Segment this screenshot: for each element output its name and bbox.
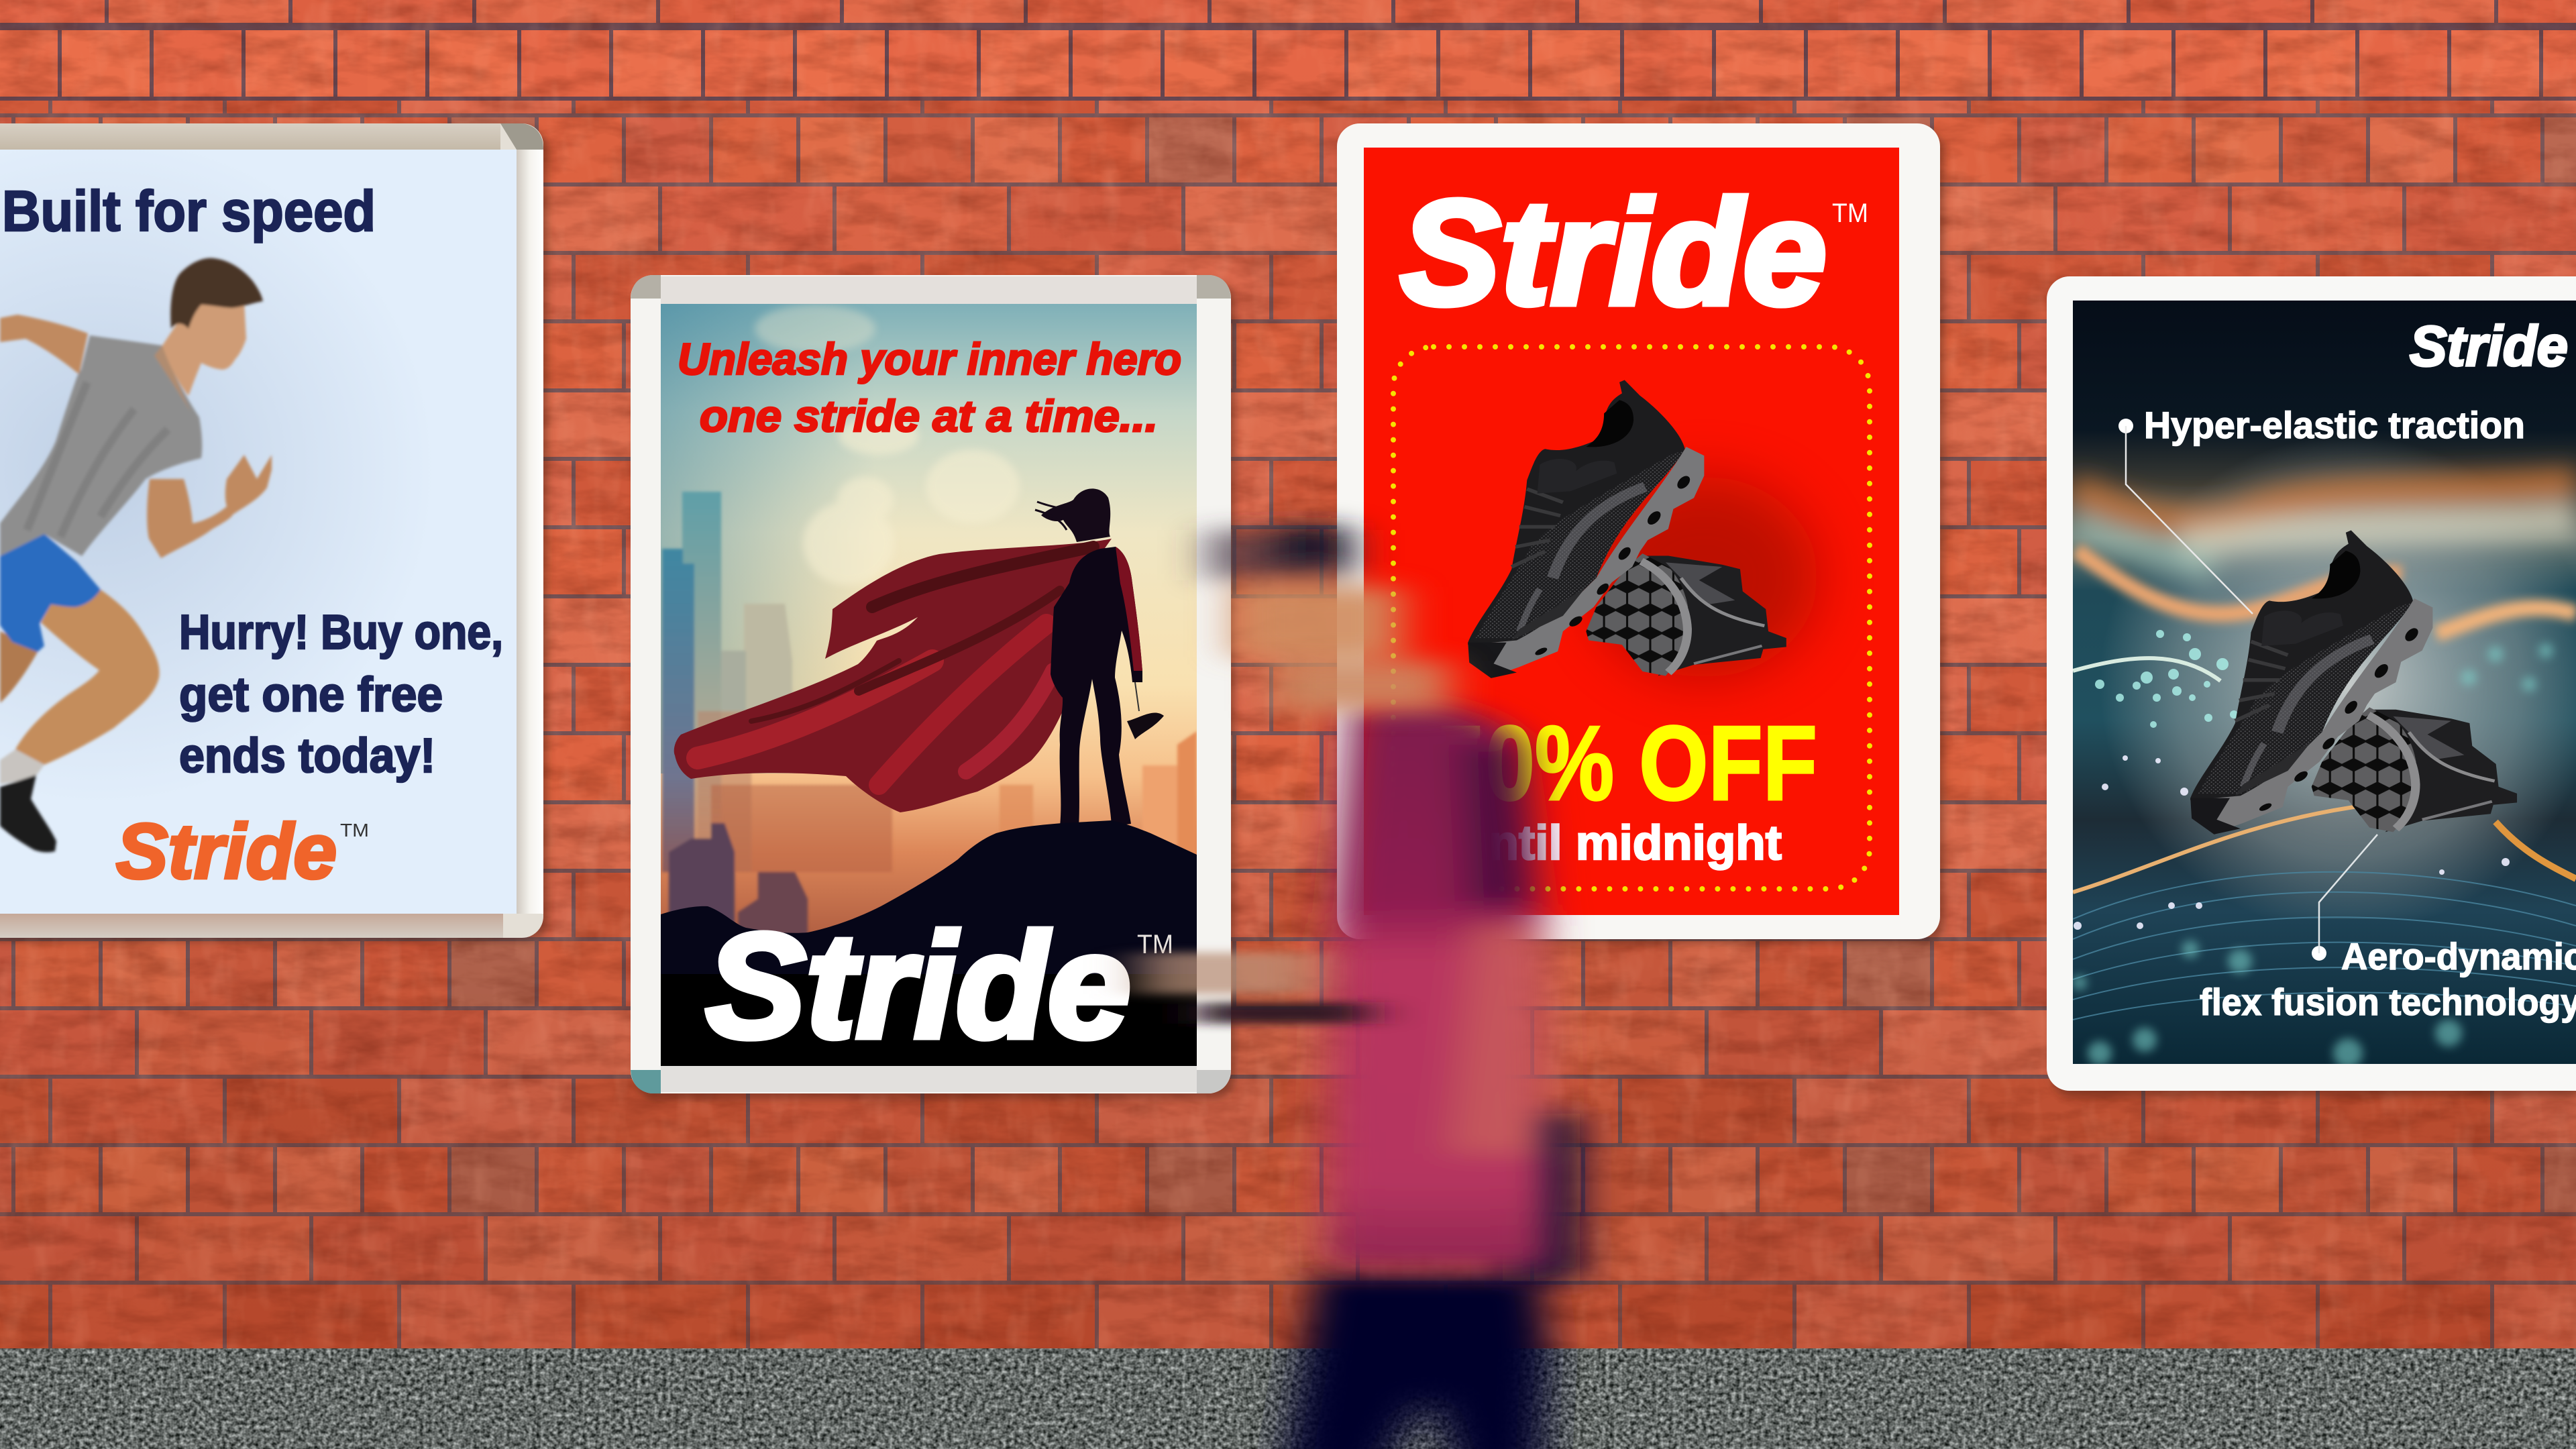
shoe pair with shadow: [1468, 380, 1818, 678]
abstract background: [2072, 301, 2576, 1068]
dotted border: [1393, 347, 1870, 889]
cape: [674, 539, 1112, 812]
hill and black base: [661, 820, 1197, 1066]
hero headline: one stride at a time...: [700, 391, 1158, 441]
pavement: [0, 1348, 2576, 1449]
callout: hyper-elastic traction: Hyper-elastic traction: [2144, 404, 2525, 446]
outstretched arm: [1140, 953, 1368, 1024]
stride logo white: Stride: [706, 903, 1131, 1069]
hero headline: [678, 334, 1181, 441]
poster 4: tech features: [2047, 276, 2576, 1096]
stride logo orange: TM: [340, 820, 369, 841]
discount text: 50% OFF: [1436, 704, 1817, 822]
red panel: [1364, 148, 1899, 915]
shoe pair: [2190, 531, 2517, 835]
callout: hyper-elastic traction: [2118, 404, 2525, 614]
callout: aero-dynamic flex fusion technology: [2200, 835, 2576, 1023]
stride logo white: TM: [1137, 930, 1173, 959]
bag: [1503, 1114, 1580, 1281]
head: [1208, 525, 1449, 711]
hero artwork: [661, 304, 1197, 1066]
blurred passer-by: [1140, 525, 1580, 1449]
offer text: get one free: [179, 668, 443, 722]
stride logo: Stride: [1400, 170, 1827, 336]
offer text: Hurry! Buy one,: [179, 606, 503, 659]
legs: [1281, 1275, 1550, 1449]
offer text: [179, 606, 503, 783]
poster 2: hero: [631, 275, 1235, 1099]
until midnight: until midnight: [1459, 816, 1782, 870]
runner: [0, 213, 357, 855]
poster 1: built for speed: [0, 123, 547, 942]
offer text: ends today!: [179, 729, 435, 783]
stride logo orange: Stride: [116, 808, 337, 895]
poster 1 panel: [0, 150, 517, 914]
stride logo: TM: [1832, 199, 1868, 228]
heading: built for speed: Built for speed: [2, 180, 376, 244]
torso: [1325, 702, 1550, 1268]
stride logo small: Stride: [2410, 315, 2568, 378]
heroine silhouette: [1035, 488, 1164, 826]
hero headline: Unleash your inner hero: [678, 334, 1181, 384]
poster 3: 50% off: [1337, 123, 1944, 943]
